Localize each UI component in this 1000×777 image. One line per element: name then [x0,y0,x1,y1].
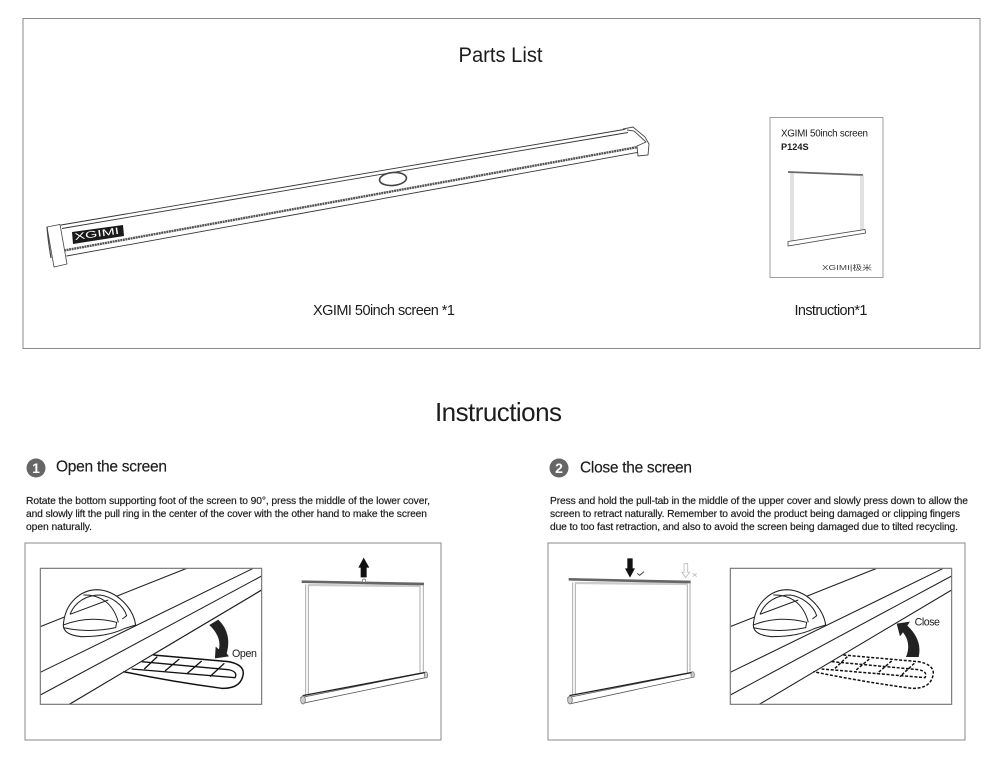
illustration: rolled-up screen [47,127,649,267]
label: open: Open [232,648,257,660]
step 2 description: due to too fast retraction, and also to avoid the screen being damaged due to tilted recycling. [550,522,958,533]
icon: check mark [637,572,644,575]
booklet model: P124S [781,142,809,152]
diagram: screen pressed closed [568,558,697,704]
heading: parts list: Parts List [458,43,543,67]
mini screen drawing [788,172,866,246]
panel: open the screen [25,543,441,740]
step 2 description: screen to retract naturally. Remember to avoid the product being damaged or clipping fingers [550,509,960,520]
step 1 heading: Open the screen [56,458,167,476]
booklet title: XGIMI 50inch screen [781,128,868,140]
label: close: Close [915,616,940,628]
step 2 heading: 2 [555,460,563,476]
panel: close the screen [548,543,965,740]
diagram: screen pulled open [301,558,428,704]
booklet logo: XGIMI|极米 [822,263,872,272]
step 2 heading: Close the screen [580,460,692,476]
step 2 description: Press and hold the pull-tab in the middle of the upper cover and slowly press down to allow the [550,496,968,507]
step 1 heading: 1 [32,460,40,476]
detail: pull ring and open foot [40,568,262,704]
arrow: pull up [358,558,369,577]
arrow: press side wrong [682,564,690,578]
step 1 description [26,496,430,533]
icon: cross mark [693,573,697,577]
caption: instruction: Instruction*1 [794,303,868,319]
panel: parts list [23,18,980,348]
step 1 description: Rotate the bottom supporting foot of the screen to 90°, press the middle of the lower cover, [26,496,430,507]
arrow: close [897,622,919,657]
step 1 description: open naturally. [26,522,92,533]
arrow: press down correct [625,558,635,578]
caption: screen: XGIMI 50inch screen *1 [313,303,455,319]
arrow: open [209,620,229,658]
illustration: instruction booklet [770,118,883,278]
logo badge: XGIMI [72,225,124,244]
logo badge: XGIMI: XGIMI [74,226,120,243]
step 1 description: and slowly lift the pull ring in the center of the cover with the other hand to make the screen [26,509,427,520]
heading: instructions: Instructions [435,397,562,427]
step 2 description [550,496,968,533]
dashed foot [813,655,933,688]
detail: pull ring and closed foot [730,568,952,704]
